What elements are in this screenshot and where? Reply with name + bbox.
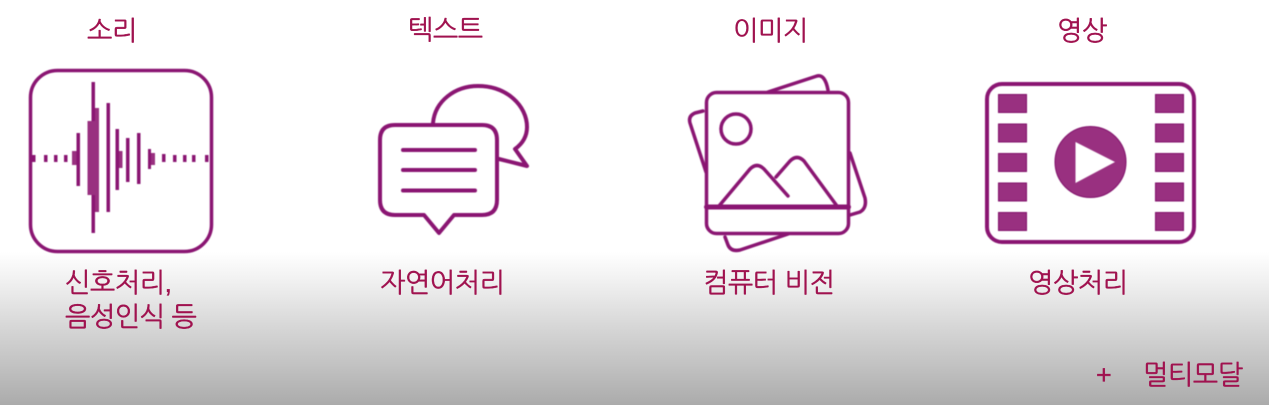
icon: speech bubbles <box>380 86 527 233</box>
heading: sound: 소리 <box>87 16 137 46</box>
caption: signal processing and speech recognition <box>65 268 196 332</box>
icon: video film strip <box>987 84 1194 242</box>
icon: sound waveform <box>30 70 212 252</box>
caption: natural language processing: 자연어처리 <box>380 268 504 298</box>
caption: signal processing and speech recognition: 음성인식 등 <box>65 302 196 332</box>
heading: image: 이미지 <box>733 16 808 46</box>
plus sign: + <box>1096 360 1111 390</box>
caption: signal processing and speech recognition: 신호처리, <box>65 268 172 298</box>
heading: video: 영상 <box>1057 16 1107 46</box>
icon: photo stack <box>690 76 865 250</box>
caption: video processing: 영상처리 <box>1028 268 1128 298</box>
caption: multimodal: 멀티모달 <box>1143 360 1243 390</box>
heading: text: 텍스트 <box>408 15 483 45</box>
caption: computer vision: 컴퓨터 비전 <box>703 268 834 298</box>
